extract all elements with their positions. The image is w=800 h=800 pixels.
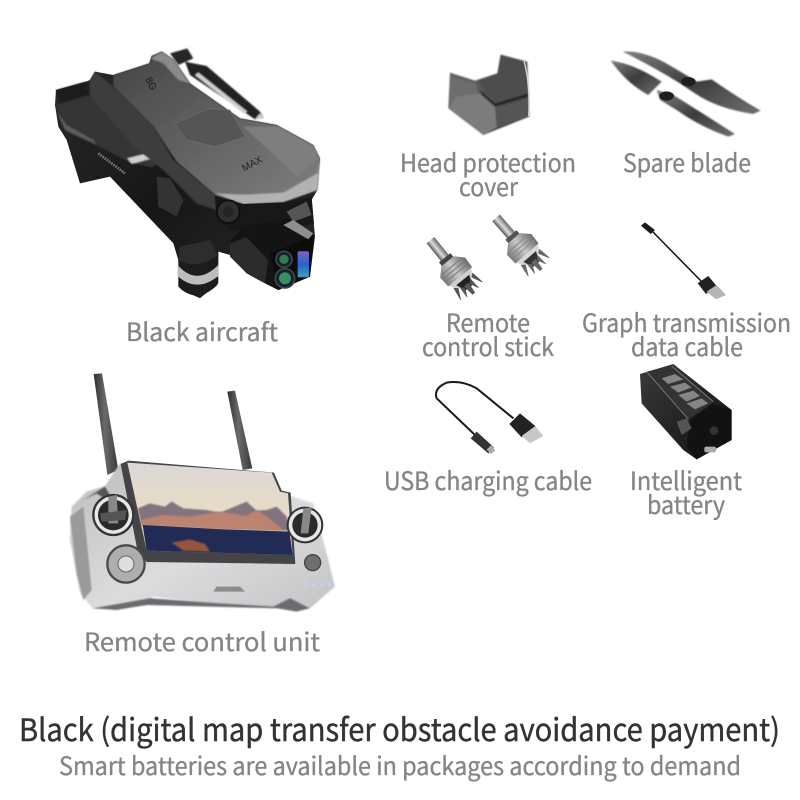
- label: head protection cover: cover: [459, 168, 518, 204]
- latch: [213, 587, 245, 592]
- icon: graph transmission data cable: [641, 222, 726, 299]
- icon: usb charging cable: [436, 382, 543, 454]
- label: intelligent battery: Intelligent: [630, 462, 743, 498]
- status lights: [304, 583, 331, 586]
- icon: head protection cover: [448, 55, 529, 135]
- label: remote control stick: Remote: [446, 304, 530, 340]
- front sensor: [215, 197, 314, 233]
- shell highlights: [151, 52, 320, 204]
- label: head protection cover: [400, 144, 576, 204]
- left stick: [93, 495, 133, 535]
- label: spare blade: Spare blade: [623, 144, 751, 180]
- right antenna: [227, 391, 252, 470]
- motor: [178, 240, 218, 295]
- button: [305, 555, 321, 571]
- gimbal camera: [230, 218, 314, 290]
- label: intelligent battery: [630, 462, 743, 522]
- left antenna: [94, 373, 118, 475]
- drone silhouette base: [55, 52, 320, 298]
- icon: remote control sticks: [418, 207, 553, 304]
- right stick: [288, 507, 322, 542]
- label: black aircraft: Black aircraft: [126, 313, 279, 349]
- model mark MAX: MAX: [240, 154, 265, 174]
- d-pad: [107, 545, 145, 583]
- label: graph transmission data cable: data cable: [631, 328, 743, 364]
- label: graph transmission data cable: [582, 304, 791, 364]
- subtitle: Smart batteries are available in packages according to demand: [59, 747, 741, 783]
- rear folded propeller: [170, 48, 264, 119]
- icon: intelligent battery: [640, 364, 732, 459]
- top panel: [175, 109, 245, 147]
- icon: spare blade: [611, 51, 761, 137]
- controller body: [70, 463, 335, 609]
- arm with label: [98, 153, 183, 217]
- screen bezel: [121, 461, 295, 564]
- main shell: [113, 52, 320, 204]
- label: remote control stick: control stick: [422, 328, 554, 364]
- label: remote control stick: [422, 304, 554, 364]
- model mark 8G: 8G: [142, 76, 158, 93]
- label: usb charging cable: USB charging cable: [384, 462, 592, 498]
- raised arm: [90, 72, 217, 210]
- left folded propeller: [55, 82, 161, 167]
- label: head protection cover: Head protection: [400, 144, 576, 180]
- label: intelligent battery: battery: [647, 486, 725, 522]
- label: remote control unit: Remote control unit: [84, 623, 321, 659]
- remote control: [70, 373, 335, 612]
- drone: black aircraft: [55, 48, 320, 298]
- screen image: [127, 463, 293, 555]
